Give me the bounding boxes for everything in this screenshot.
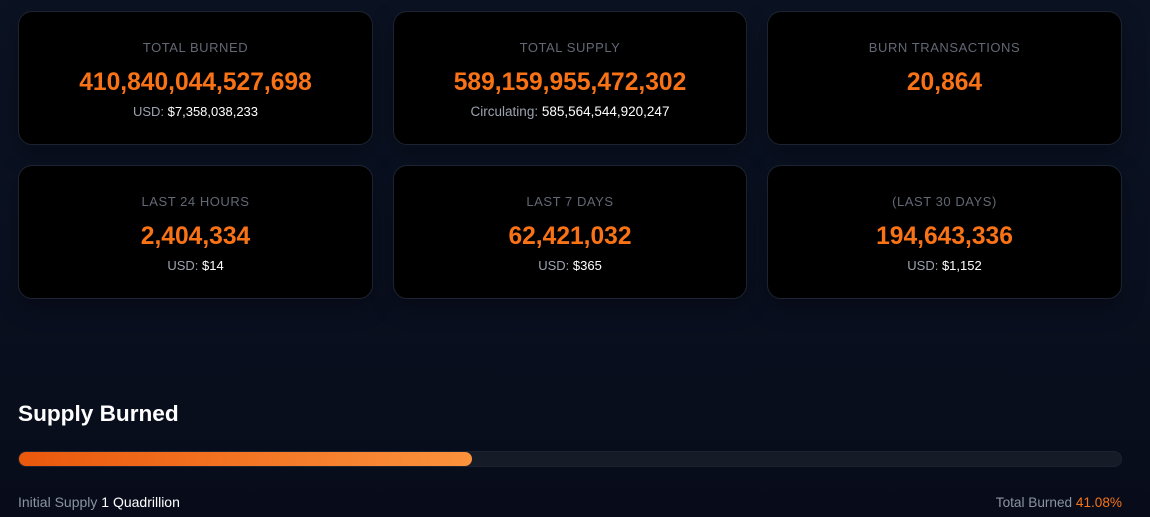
value: last 7 days: 62,421,032 — [508, 223, 632, 250]
label: last 30 days: (LAST 30 DAYS) — [892, 194, 997, 209]
panel: burn transactions — [767, 11, 1122, 145]
label: total supply: TOTAL SUPPLY — [520, 40, 620, 55]
value: total burned: 410,840,044,527,698 — [79, 69, 312, 96]
panel: last 7 days — [393, 165, 747, 299]
label: last 7 days: LAST 7 DAYS — [526, 194, 614, 209]
value: burn transactions: 20,864 — [907, 69, 982, 96]
usd: last 30 days: USD: $1,152 — [907, 258, 982, 273]
usd: last 24 hours: USD: $14 — [167, 258, 224, 273]
value: last 24 hours: 2,404,334 — [141, 223, 250, 250]
heading: supply burned: Supply Burned — [18, 401, 179, 426]
value: total supply: 589,159,955,472,302 — [454, 69, 686, 96]
panel: total burned — [18, 11, 373, 145]
circulating supply: Circulating: 585,564,544,920,247 — [471, 104, 669, 119]
label: total burned: TOTAL BURNED — [143, 40, 248, 55]
progress fill: 41.08% burned — [19, 452, 472, 466]
label: last 24 hours: LAST 24 HOURS — [141, 194, 250, 209]
initial supply caption: Initial Supply 1 Quadrillion — [18, 494, 180, 510]
usd: last 7 days: USD: $365 — [538, 258, 602, 273]
panel: last 24 hours — [18, 165, 373, 299]
usd: total burned: USD: $7,358,038,233 — [133, 104, 258, 119]
progress track — [18, 451, 1122, 467]
panel: last 30 days — [767, 165, 1122, 299]
label: burn transactions: BURN TRANSACTIONS — [869, 40, 1020, 55]
total burned percentage caption: Total Burned 41.08% — [996, 495, 1122, 510]
panel: total supply — [393, 11, 747, 145]
value: last 30 days: 194,643,336 — [876, 223, 1013, 250]
